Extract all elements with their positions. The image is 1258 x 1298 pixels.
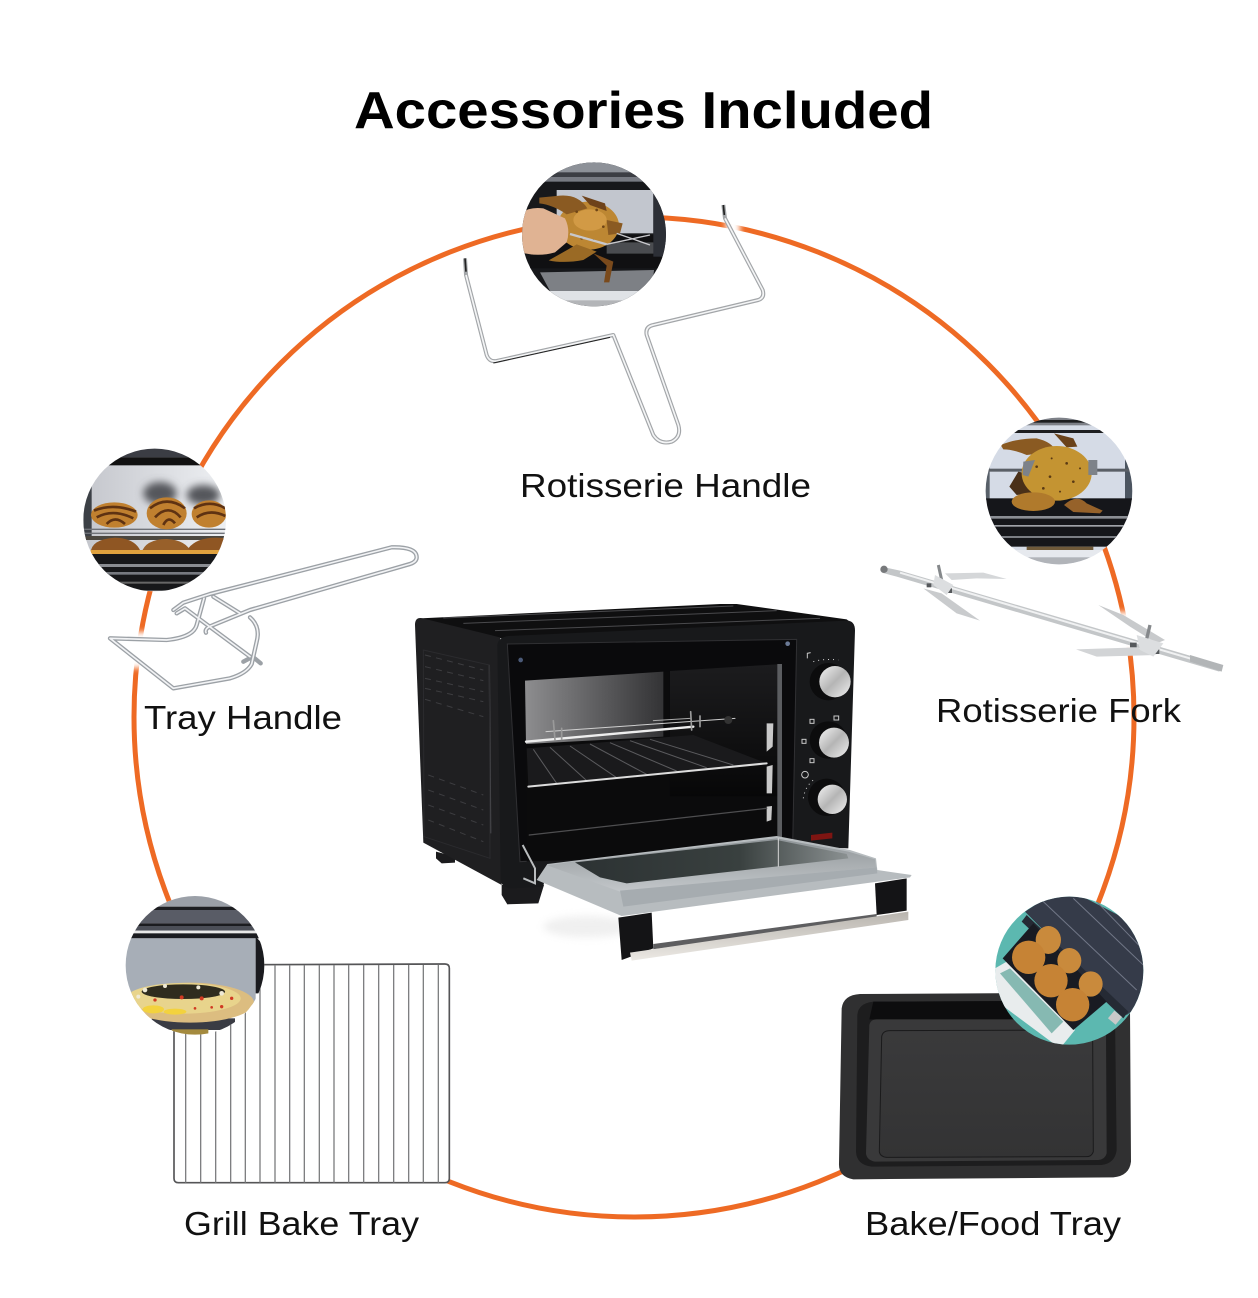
oven shadow	[543, 916, 630, 937]
label: tray handle: Tray Handle	[144, 699, 342, 736]
oven door	[537, 836, 912, 916]
photo: pizza	[125, 895, 265, 1038]
control knobs	[802, 653, 851, 816]
oven back wall	[525, 672, 663, 744]
label: rotisserie fork: Rotisserie Fork	[936, 692, 1182, 729]
accessory: bake food tray	[839, 993, 1131, 1179]
oven feet	[436, 852, 544, 904]
screws	[518, 658, 523, 662]
oven cavity	[525, 664, 782, 862]
accessory: tray handle	[110, 547, 417, 688]
door hinge	[523, 845, 535, 883]
accessory: rotisserie fork	[880, 565, 1223, 672]
oven racks	[526, 712, 767, 835]
door opening	[507, 639, 797, 862]
ring gaps	[122, 214, 1144, 668]
label: rotisserie handle: Rotisserie Handle	[520, 467, 811, 504]
central oven	[415, 604, 912, 961]
photo: biscuits in teal oven	[995, 896, 1144, 1045]
oven front	[497, 621, 855, 888]
label: grill bake tray: Grill Bake Tray	[184, 1205, 420, 1242]
photo: croissants	[83, 447, 227, 593]
oven top	[420, 604, 854, 638]
photo: roast chicken on spit	[983, 417, 1137, 567]
label: bake food tray: Bake/Food Tray	[865, 1205, 1122, 1242]
red indicator light	[811, 833, 832, 841]
orange ring	[134, 217, 1134, 1217]
door handle	[618, 913, 653, 960]
accessory: grill bake tray	[174, 964, 449, 1183]
photo: rotisserie chicken with hand	[522, 162, 666, 306]
title: Accessories Included	[354, 82, 933, 140]
oven side	[415, 618, 502, 885]
side vents	[425, 655, 483, 842]
baking rack slats	[527, 735, 767, 787]
accessory: rotisserie handle	[465, 205, 763, 442]
side wall reflections	[767, 723, 773, 822]
